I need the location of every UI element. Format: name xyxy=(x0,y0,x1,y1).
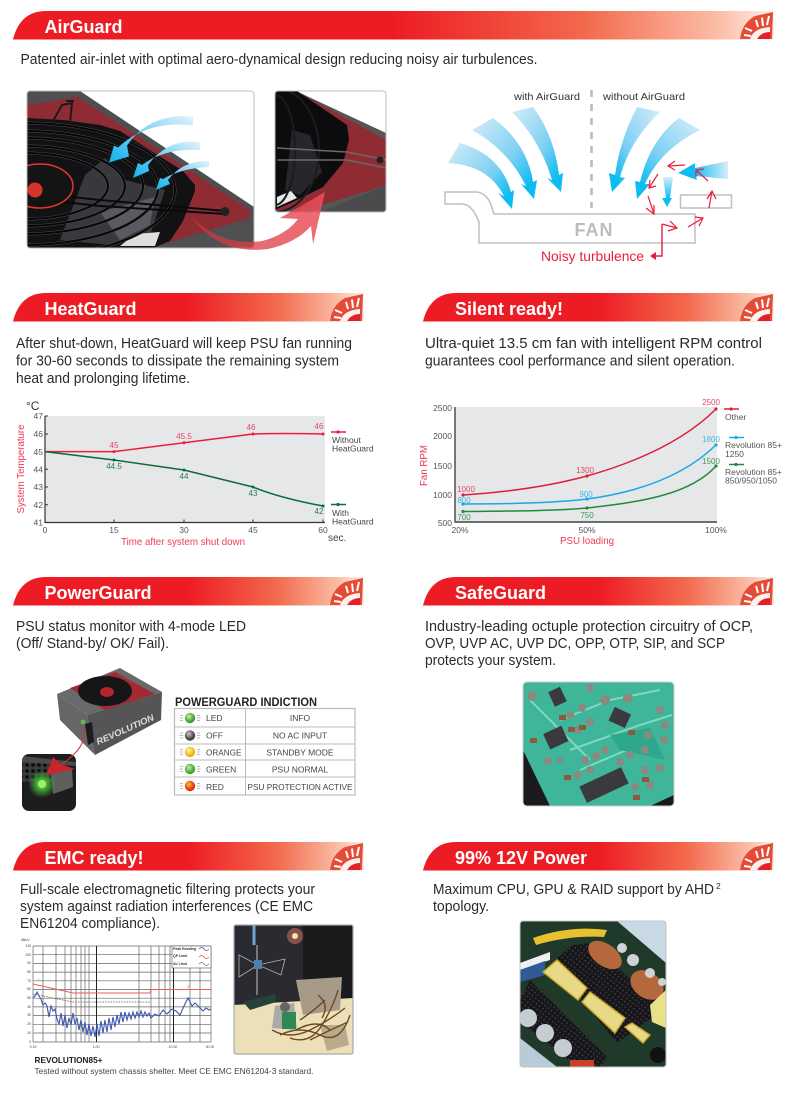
row: ORANGE xyxy=(180,747,334,758)
photo: inlet close-up xyxy=(276,92,386,212)
photo frame xyxy=(234,925,353,1054)
series: limit lines: 2 xyxy=(187,984,190,989)
header: EMC ready: EMC ready! xyxy=(44,848,144,868)
legend: with HeatGuard: With xyxy=(332,508,349,518)
row: OFF: OFF xyxy=(206,730,223,740)
chart: EMC emissions: 0.15 xyxy=(30,1045,36,1049)
line chart: fan RPM: Fan RPM xyxy=(419,445,430,486)
series: Revolution 85+ 850/950/1050: 750 xyxy=(580,511,594,520)
description: HeatGuard: heat and prolonging lifetime. xyxy=(16,371,190,387)
row: LED: LED xyxy=(206,713,223,723)
line chart: temperature after shutdown: 42 xyxy=(34,500,43,510)
photo: power supply unit: REVOLUTION xyxy=(95,712,156,747)
series: with HeatGuard: 44 xyxy=(180,472,189,481)
row: OFF xyxy=(180,730,327,741)
legend: Revolution 85+ 850/950/1050: 850/950/1050 xyxy=(725,476,777,486)
line chart: fan RPM: 100% xyxy=(705,525,727,535)
description: AirGuard: Patented air-inlet with optimal aero-dynamical design reducing noisy air turbulences. xyxy=(20,52,538,68)
header: PowerGuard xyxy=(13,577,364,606)
line chart: temperature after shutdown: 45 xyxy=(248,525,258,535)
series: Revolution 85+ 850/950/1050 xyxy=(457,457,720,522)
series: without HeatGuard: 45.5 xyxy=(176,432,192,441)
description: PowerGuard: (Off/ Stand-by/ OK/ Fail). xyxy=(16,636,169,652)
legend: Revolution 85+ 1250: 1250 xyxy=(725,449,744,459)
footnote: REVOLUTION85+ xyxy=(34,1055,314,1076)
row: ORANGE: ORANGE xyxy=(206,748,242,758)
series: with HeatGuard: 42 xyxy=(315,507,324,516)
series: without HeatGuard: 45 xyxy=(110,441,119,450)
photo: power supply unit xyxy=(57,668,162,755)
icon: red turbulence arrows xyxy=(646,161,716,231)
chart: EMC emissions: 20 xyxy=(27,1022,31,1026)
series: without HeatGuard: 46 xyxy=(247,423,256,432)
arrow: red transition arrow xyxy=(192,192,325,250)
chart: EMC emissions: 60 xyxy=(27,987,31,991)
description: EMC ready xyxy=(20,882,315,932)
line chart: fan RPM: 500 xyxy=(438,518,452,528)
panel: 99% 12V Power xyxy=(423,842,774,1070)
legend: with HeatGuard: HeatGuard xyxy=(332,516,374,526)
icon: deflected airflow xyxy=(662,161,728,207)
line chart: fan RPM: 20% xyxy=(451,525,469,535)
line chart: fan RPM: 2000 xyxy=(433,431,452,441)
photo: circuit board xyxy=(523,682,674,806)
header: HeatGuard xyxy=(13,293,364,322)
label: FAN: FAN xyxy=(574,220,614,240)
chart: EMC emissions: 50 xyxy=(27,996,31,1000)
series: limit lines: 1 xyxy=(37,977,40,982)
series: Other: 2500 xyxy=(702,398,720,407)
description: SafeGuard xyxy=(425,619,753,669)
icon: blue airflow arrows on photo xyxy=(109,116,209,190)
panel: EMC ready xyxy=(13,842,364,1076)
chart: EMC emissions: 100 xyxy=(25,953,31,957)
description: Silent ready: Ultra-quiet 13.5 cm fan with intelligent RPM control xyxy=(425,336,762,352)
series: with HeatGuard: 43 xyxy=(249,489,258,498)
header: HeatGuard: HeatGuard xyxy=(44,299,137,319)
label: without AirGuard: without AirGuard xyxy=(602,91,685,103)
row: GREEN: PSU NORMAL xyxy=(272,764,328,774)
series: Other: 1000 xyxy=(457,485,475,494)
header: 99% 12V Power: 99% 12V Power xyxy=(455,848,587,868)
legend: Revolution 85+ 1250: Revolution 85+ xyxy=(725,440,782,450)
photo: fan inlet corner xyxy=(28,92,254,248)
legend: Revolution 85+ 850/950/1050 xyxy=(725,463,782,486)
description: SafeGuard: protects your system. xyxy=(425,653,556,669)
panel: SafeGuard xyxy=(423,577,774,806)
panel: Silent ready xyxy=(419,293,782,547)
legend: EMC chart xyxy=(172,946,211,968)
chart: EMC emissions: dBuV xyxy=(21,938,30,942)
legend: without HeatGuard xyxy=(331,430,374,454)
chart: EMC emissions: 90 xyxy=(27,961,31,965)
photo: EMC test setup xyxy=(234,925,353,1054)
photo frame xyxy=(275,91,386,212)
series: Other: 1300 xyxy=(576,466,594,475)
diagram: fan airflow xyxy=(445,90,732,264)
label: with AirGuard: with AirGuard xyxy=(513,91,580,103)
description: EMC ready: Full-scale electromagnetic filtering protects your xyxy=(20,882,315,898)
row: GREEN: GREEN xyxy=(206,764,236,774)
table: PowerGuard indication: POWERGUARD INDICTION xyxy=(175,695,317,709)
legend: Other xyxy=(724,407,746,422)
series: Other xyxy=(457,398,720,497)
fan outline xyxy=(445,192,695,243)
row: RED: PSU PROTECTION ACTIVE xyxy=(248,782,353,792)
header: PowerGuard: PowerGuard xyxy=(44,583,152,603)
description: 99% 12V Power: topology. xyxy=(433,899,489,915)
description: Silent ready xyxy=(425,336,762,370)
line chart: temperature after shutdown: 60 xyxy=(318,525,328,535)
series: limit lines xyxy=(33,977,211,1002)
line chart: temperature after shutdown: 15 xyxy=(109,525,119,535)
description: HeatGuard: After shut-down, HeatGuard will keep PSU fan running xyxy=(16,336,352,352)
line chart: fan RPM: 1500 xyxy=(433,461,452,471)
header: 99% 12V Power xyxy=(423,842,774,870)
series: Revolution 85+ 1250: 900 xyxy=(579,490,593,499)
header: AirGuard: AirGuard xyxy=(44,17,123,37)
row: RED xyxy=(180,781,353,792)
row: OFF: NO AC INPUT xyxy=(273,730,327,740)
line chart: fan RPM: 50% xyxy=(578,525,596,535)
chart: EMC emissions: 80 xyxy=(27,970,31,974)
line chart: fan RPM: 2500 xyxy=(433,403,452,413)
chart: EMC emissions: 30 xyxy=(27,1013,31,1017)
panel: HeatGuard xyxy=(13,293,374,548)
line chart: temperature after shutdown: °C xyxy=(26,399,40,413)
chart: EMC emissions: 10 xyxy=(27,1031,31,1035)
series: Revolution 85+ 850/950/1050: 1500 xyxy=(702,457,720,466)
description: SafeGuard: OVP, UVP AC, UVP DC, OPP, OTP, SIP, and SCP xyxy=(425,636,725,652)
series: Revolution 85+ 1250: 1800 xyxy=(702,435,720,444)
line chart: temperature after shutdown xyxy=(15,399,374,548)
legend: Revolution 85+ 850/950/1050: Revolution 85+ xyxy=(725,467,782,477)
row: LED: INFO xyxy=(290,713,311,723)
description: 99% 12V Power xyxy=(433,881,721,915)
header: AirGuard xyxy=(13,11,774,40)
series: without HeatGuard xyxy=(45,422,324,453)
panel: PowerGuard xyxy=(13,577,364,811)
line chart: fan RPM xyxy=(419,398,782,547)
series: Revolution 85+ 1250 xyxy=(457,435,720,506)
description: HeatGuard: for 30-60 seconds to dissipate the remaining system xyxy=(16,354,339,370)
chart: EMC emissions: 110 xyxy=(25,944,31,948)
footnote: REVOLUTION85+: REVOLUTION85+ xyxy=(34,1055,103,1065)
series: peak reading xyxy=(33,992,211,1037)
legend: Other: Other xyxy=(725,412,746,422)
inset: LED close-up xyxy=(22,754,76,811)
chart: EMC emissions: 40 xyxy=(27,1005,31,1009)
description: PowerGuard xyxy=(16,619,246,652)
row: ORANGE: STANDBY MODE xyxy=(266,748,334,758)
table: PowerGuard indication xyxy=(174,695,355,795)
icon: airflow arrows with AirGuard xyxy=(448,107,563,209)
legend: without HeatGuard: Without xyxy=(332,435,361,445)
row: GREEN xyxy=(180,764,328,774)
chart: EMC emissions xyxy=(21,938,214,1049)
photo: power circuitry xyxy=(519,921,669,1070)
panel: AirGuard xyxy=(0,11,774,264)
description: Silent ready: guarantees cool performance and silent operation. xyxy=(425,354,735,370)
series: Revolution 85+ 1250: 800 xyxy=(457,496,471,505)
description: HeatGuard xyxy=(16,336,352,387)
chart: EMC emissions: 1.00 xyxy=(93,1045,99,1049)
header: EMC ready xyxy=(13,842,364,870)
description: 99% 12V Power: 2 xyxy=(716,881,721,891)
header: Silent ready: Silent ready! xyxy=(455,299,563,319)
photo frame xyxy=(523,682,674,806)
line chart: temperature after shutdown: 0 xyxy=(43,525,48,535)
chart: EMC emissions: 10.00 xyxy=(169,1045,177,1049)
description: PowerGuard: PSU status monitor with 4-mode LED xyxy=(16,619,246,635)
line chart: temperature after shutdown: 44 xyxy=(34,464,43,474)
footnote: REVOLUTION85+: Tested without system chassis shelter. Meet CE EMC EN61204-3 standard. xyxy=(34,1066,314,1076)
line chart: temperature after shutdown: Time after system shut down xyxy=(121,536,245,548)
legend: EMC chart: Peak Reading xyxy=(173,947,196,951)
line chart: temperature after shutdown: 41 xyxy=(34,518,43,528)
line chart: fan RPM: 1000 xyxy=(433,490,452,500)
chart: EMC emissions: 70 xyxy=(27,979,31,983)
line chart: temperature after shutdown: 30 xyxy=(179,525,189,535)
callout: noisy turbulence xyxy=(541,224,662,264)
chart: EMC emissions: 0 xyxy=(29,1040,31,1044)
legend: without HeatGuard: HeatGuard xyxy=(332,444,374,454)
description: SafeGuard: Industry-leading octuple protection circuitry of OCP, xyxy=(425,619,753,635)
header: SafeGuard: SafeGuard xyxy=(455,583,546,603)
photo frame xyxy=(520,921,666,1067)
line chart: temperature after shutdown: sec. xyxy=(328,533,346,544)
description: EMC ready: EN61204 compliance). xyxy=(20,916,160,932)
callout: noisy turbulence: Noisy turbulence xyxy=(541,248,644,264)
icon: airflow arrows without AirGuard xyxy=(609,107,700,199)
series: with HeatGuard xyxy=(45,452,324,516)
legend: EMC chart: QP Limit xyxy=(173,954,188,958)
header: SafeGuard xyxy=(423,577,774,606)
row: LED xyxy=(180,713,311,723)
photo frame xyxy=(27,91,254,248)
series: without HeatGuard: 46 xyxy=(315,422,324,431)
legend: EMC chart: AV Limit xyxy=(173,962,188,966)
arrow: LED callout xyxy=(46,725,84,775)
header: Silent ready xyxy=(423,293,774,322)
line chart: temperature after shutdown: 46 xyxy=(34,429,43,439)
legend: Revolution 85+ 1250 xyxy=(725,436,782,459)
line chart: temperature after shutdown: 43 xyxy=(34,482,43,492)
line chart: temperature after shutdown: 45 xyxy=(34,447,43,457)
legend: with HeatGuard xyxy=(331,503,374,526)
line chart: temperature after shutdown: 47 xyxy=(34,411,43,421)
line chart: fan RPM: PSU loading xyxy=(560,535,614,547)
series: Revolution 85+ 850/950/1050: 700 xyxy=(457,513,471,522)
row: RED: RED xyxy=(206,782,224,792)
line chart: temperature after shutdown: System Temperature xyxy=(15,424,27,514)
chart: EMC emissions: 30.00 xyxy=(206,1045,214,1049)
description: EMC ready: system against radiation interferences (CE EMC xyxy=(20,899,313,915)
description: 99% 12V Power: Maximum CPU, GPU & RAID support by AHD xyxy=(433,882,714,898)
series: with HeatGuard: 44.5 xyxy=(106,462,122,471)
